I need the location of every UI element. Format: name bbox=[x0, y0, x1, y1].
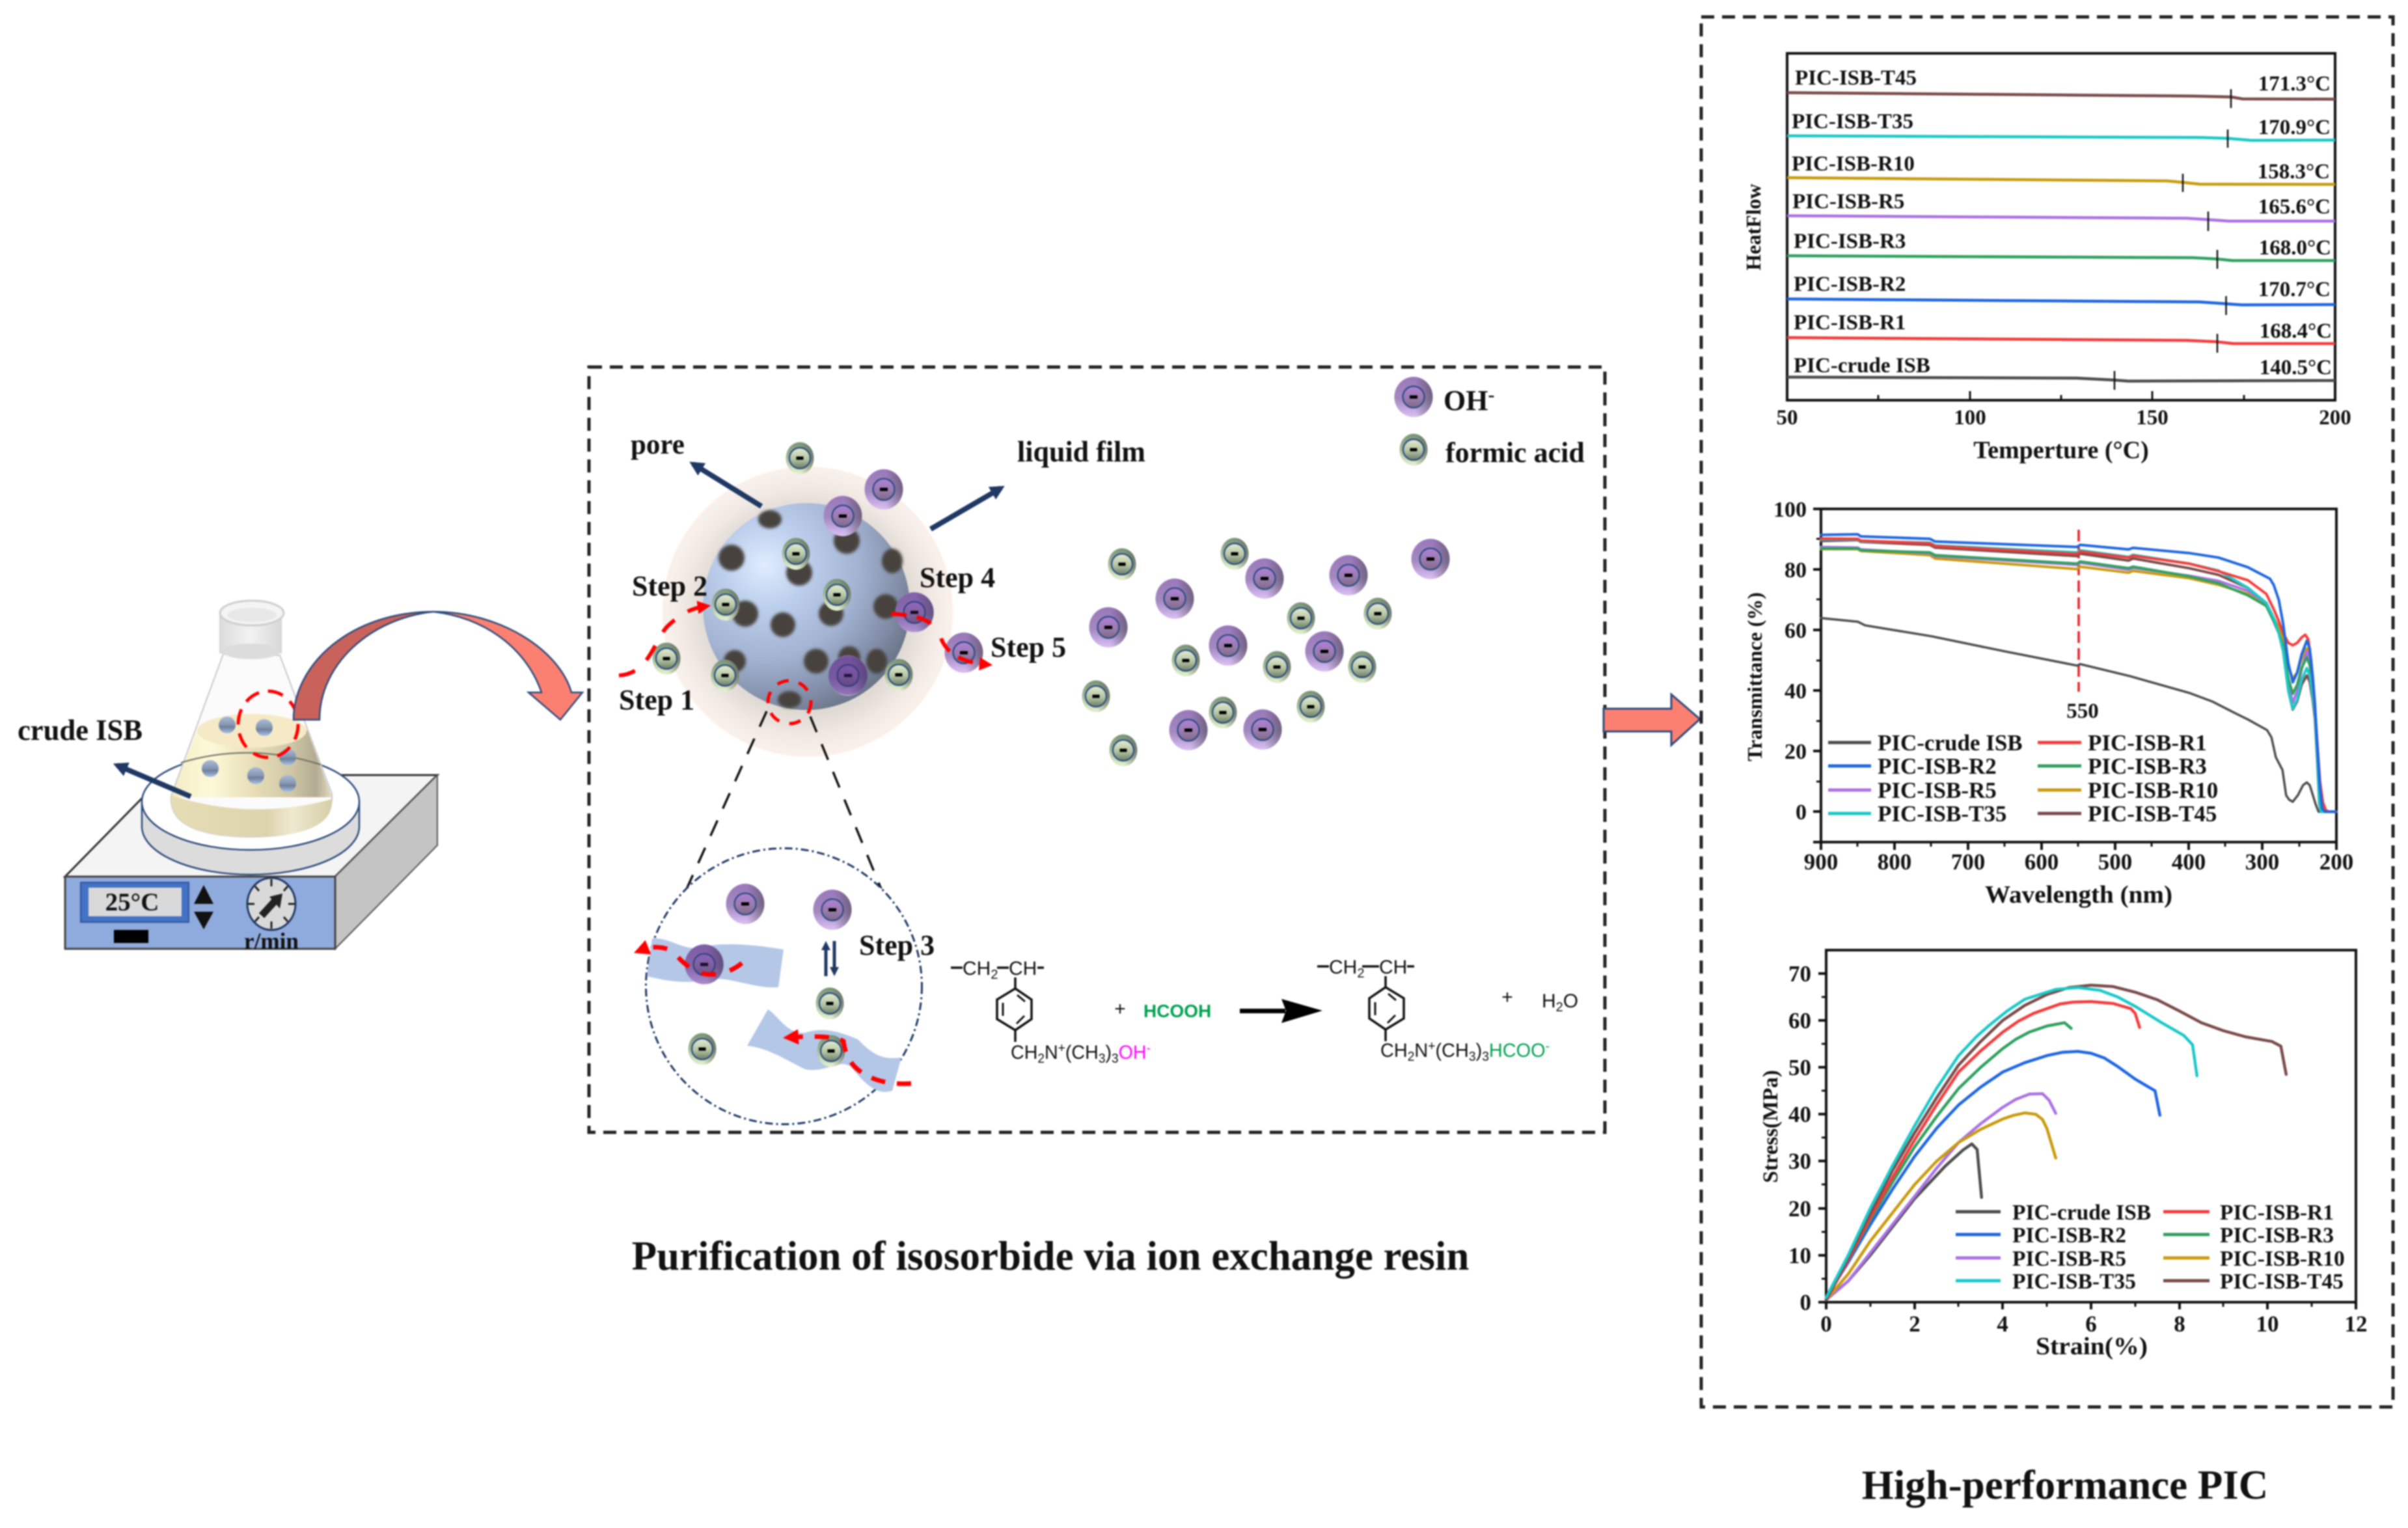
reactant resin structure: 3 bbox=[1099, 1052, 1105, 1066]
product resin structure: CH bbox=[1329, 957, 1357, 978]
stress x axis labels: 2 bbox=[1909, 1311, 1921, 1337]
dsc x axis title: Temperture (°C) bbox=[1973, 437, 2149, 464]
up and down buttons bbox=[194, 885, 213, 929]
panel: performance results bbox=[1701, 17, 2393, 1407]
stress y axis labels: 60 bbox=[1788, 1008, 1811, 1033]
label: crude ISB: crude ISB bbox=[18, 713, 143, 746]
flask with crude ISB bbox=[117, 601, 332, 837]
ribbon upper bbox=[647, 938, 784, 987]
dsc Tg values: 168.0°C bbox=[2259, 236, 2331, 260]
speed label: r/min bbox=[244, 928, 299, 954]
reactant resin structure: (CH bbox=[1065, 1042, 1099, 1063]
dsc Tg values: 170.7°C bbox=[2258, 278, 2331, 301]
panel: purification process bbox=[589, 367, 1605, 1132]
label: liquid film: liquid film bbox=[1017, 435, 1145, 468]
step labels: Step 1 bbox=[619, 684, 694, 716]
dsc Tg values: 170.9°C bbox=[2258, 116, 2331, 139]
spectrum legend: PIC-ISB-R5 bbox=[1878, 778, 1997, 803]
chart: UV-vis transmittance bbox=[1743, 498, 2353, 908]
dsc x axis labels: 100 bbox=[1954, 406, 1986, 430]
step labels: Step 3 bbox=[859, 929, 935, 961]
dsc series labels: PIC-crude ISB bbox=[1794, 354, 1930, 377]
dsc Tg values: 165.6°C bbox=[2258, 195, 2331, 219]
dsc series labels: PIC-ISB-T45 bbox=[1795, 66, 1917, 90]
plate rim seen through flask bbox=[181, 753, 321, 765]
spectrum y axis title: Transmittance (%) bbox=[1743, 592, 1766, 761]
hotplate front panel bbox=[65, 877, 335, 949]
stress y axis title: Stress(MPa) bbox=[1759, 1070, 1783, 1183]
spectrum y axis labels: 100 bbox=[1773, 498, 1807, 522]
pore pointer arrow bbox=[693, 464, 761, 506]
reaction arrow bbox=[1240, 999, 1322, 1023]
dsc x axis labels: 200 bbox=[2319, 406, 2351, 430]
spectrum x axis labels: 500 bbox=[2098, 849, 2132, 875]
legend: OH bbox=[1443, 385, 1488, 416]
stress y axis labels: 70 bbox=[1788, 961, 1811, 987]
liquid body bbox=[171, 730, 332, 797]
stress x axis title: Strain(%) bbox=[2036, 1333, 2148, 1360]
spectrum x axis labels: 700 bbox=[1951, 849, 1985, 875]
product resin structure: - bbox=[1546, 1039, 1550, 1054]
spectrum x axis title: Wavelength (nm) bbox=[1985, 881, 2172, 908]
red path upper bbox=[641, 947, 742, 974]
spectrum y axis labels: 0 bbox=[1796, 800, 1807, 825]
product resin structure: (CH bbox=[1436, 1040, 1469, 1061]
spectrum legend: PIC-ISB-R3 bbox=[2088, 754, 2207, 779]
reactant resin structure: 2 bbox=[991, 968, 998, 982]
stress x axis labels: 4 bbox=[1997, 1311, 2008, 1337]
reactant resin structure: - bbox=[1147, 1041, 1151, 1056]
stress x axis labels bbox=[1820, 1311, 2368, 1337]
reactant resin structure: ) bbox=[1105, 1042, 1112, 1063]
magnified pore view bbox=[641, 849, 922, 1125]
product resin structure: CH bbox=[1380, 1040, 1408, 1061]
liquid bowl bbox=[171, 795, 332, 837]
stress legend: PIC-ISB-T45 bbox=[2220, 1270, 2344, 1294]
dsc x axis labels bbox=[1777, 406, 2351, 430]
spectrum 550 label: 550 bbox=[2066, 700, 2099, 723]
stress frame and ticks bbox=[1818, 950, 2356, 1309]
reactant resin structure: 2 bbox=[1037, 1052, 1045, 1066]
zoom projection lines bbox=[687, 711, 881, 889]
spectrum x axis labels: 800 bbox=[1878, 849, 1911, 875]
spectrum legend: PIC-ISB-R10 bbox=[2088, 778, 2218, 803]
chart: stress strain bbox=[1759, 950, 2368, 1360]
free ions in solution bbox=[1082, 538, 1450, 767]
red dashed highlight circle bbox=[238, 691, 298, 757]
heating plate disk bbox=[142, 754, 359, 875]
pointer arrow bbox=[117, 765, 191, 797]
liquid film pointer arrow bbox=[931, 488, 1001, 529]
spectrum y axis labels bbox=[1773, 498, 1807, 825]
red path steps 4 to 5 bbox=[891, 614, 986, 664]
stress legend: PIC-ISB-R1 bbox=[2220, 1201, 2334, 1225]
stress y axis labels: 30 bbox=[1788, 1149, 1811, 1174]
resin bead bbox=[663, 467, 953, 757]
dsc frame bbox=[1787, 53, 2335, 400]
spectrum legend: PIC-ISB-T35 bbox=[1878, 801, 2006, 826]
dsc Tg values bbox=[2258, 72, 2332, 379]
stress x axis labels: 8 bbox=[2174, 1311, 2185, 1337]
product resin structure bbox=[1317, 957, 1550, 1064]
product resin structure: 3 bbox=[1469, 1050, 1476, 1064]
temperature display bbox=[81, 882, 189, 922]
stress y axis labels: 20 bbox=[1788, 1196, 1811, 1221]
isb beads bbox=[202, 716, 296, 792]
spectrum curves bbox=[1821, 534, 2336, 812]
hotplate side face bbox=[335, 775, 437, 949]
spectrum y axis labels: 80 bbox=[1785, 558, 1807, 582]
dsc glass transition ticks bbox=[2114, 89, 2231, 390]
red path lower bbox=[791, 1037, 911, 1084]
dsc series labels bbox=[1792, 66, 1930, 377]
dsc curves bbox=[1787, 92, 2335, 381]
dsc series labels: PIC-ISB-R5 bbox=[1792, 190, 1904, 213]
panel dashed border bbox=[589, 367, 1605, 1132]
reactant resin structure: CH bbox=[1011, 1042, 1039, 1063]
liquid surface bbox=[197, 714, 307, 748]
water formula: O bbox=[1563, 990, 1578, 1012]
stress y axis labels: 10 bbox=[1788, 1243, 1811, 1268]
spectrum legend: PIC-ISB-T45 bbox=[2088, 801, 2217, 826]
dsc y axis title: HeatFlow bbox=[1742, 184, 1765, 271]
spectrum x axis labels bbox=[1804, 849, 2353, 875]
stress legend: PIC-ISB-R5 bbox=[2012, 1247, 2126, 1271]
chart: DSC heat flow bbox=[1742, 53, 2351, 464]
curved arrow into process panel bbox=[294, 612, 582, 720]
spectrum y axis labels: 40 bbox=[1785, 679, 1807, 703]
product resin structure: + bbox=[1428, 1039, 1436, 1054]
stress legend bbox=[1956, 1201, 2345, 1294]
plus sign product: + bbox=[1501, 987, 1513, 1008]
stress x axis labels: 6 bbox=[2085, 1311, 2097, 1337]
arrow to results panel bbox=[1604, 694, 1700, 745]
stress y axis labels: 0 bbox=[1800, 1290, 1811, 1315]
reaction scheme bbox=[951, 957, 1578, 1066]
spectrum x axis labels: 400 bbox=[2172, 849, 2206, 875]
stress curves bbox=[1826, 985, 2286, 1300]
legend: - bbox=[1488, 384, 1494, 405]
reactant resin structure bbox=[951, 958, 1151, 1066]
product resin structure: HCOO bbox=[1489, 1040, 1546, 1061]
step labels: Step 4 bbox=[920, 562, 995, 593]
exchange arrows bbox=[821, 941, 839, 976]
dsc x axis labels: 50 bbox=[1777, 406, 1798, 430]
spectrum x axis labels: 900 bbox=[1804, 849, 1838, 875]
dsc series labels: PIC-ISB-T35 bbox=[1792, 110, 1913, 133]
spectrum frame and ticks bbox=[1813, 509, 2336, 850]
flask glass bbox=[171, 654, 332, 837]
dsc series labels: PIC-ISB-R3 bbox=[1794, 230, 1906, 253]
stress x axis labels: 10 bbox=[2256, 1311, 2279, 1337]
water formula: 2 bbox=[1556, 1000, 1563, 1015]
stress legend: PIC-ISB-T35 bbox=[2012, 1270, 2136, 1294]
dsc series labels: PIC-ISB-R1 bbox=[1794, 311, 1906, 334]
spectrum x axis labels: 200 bbox=[2319, 849, 2353, 875]
spectrum y axis labels: 20 bbox=[1785, 740, 1807, 764]
speed dial bbox=[247, 878, 295, 930]
step labels: Step 2 bbox=[632, 570, 707, 602]
plus sign: + bbox=[1114, 998, 1126, 1020]
label: pore: pore bbox=[631, 430, 685, 460]
spectrum legend: PIC-crude ISB bbox=[1878, 730, 2023, 756]
reactant resin structure: N bbox=[1045, 1042, 1058, 1063]
reactant resin structure: 3 bbox=[1112, 1052, 1119, 1066]
step labels bbox=[619, 562, 1066, 961]
stress legend: PIC-crude ISB bbox=[2012, 1201, 2151, 1225]
stress x axis labels: 12 bbox=[2344, 1311, 2368, 1337]
temperature display: 25°C bbox=[105, 888, 159, 916]
stress y axis labels: 50 bbox=[1788, 1055, 1811, 1080]
spectrum legend: PIC-ISB-R2 bbox=[1878, 754, 1997, 779]
stress y axis labels: 40 bbox=[1788, 1102, 1811, 1127]
product resin structure: CH bbox=[1379, 957, 1407, 978]
spectrum y axis labels: 60 bbox=[1785, 619, 1807, 643]
formic acid formula: HCOOH bbox=[1143, 1001, 1211, 1021]
spectrum 550 nm marker bbox=[2077, 530, 2080, 692]
reactant resin structure: + bbox=[1058, 1041, 1065, 1056]
magnified ions bbox=[685, 884, 851, 1067]
hotplate stirrer bbox=[65, 754, 437, 954]
product resin structure: ) bbox=[1476, 1040, 1482, 1061]
reactant resin structure: OH bbox=[1119, 1042, 1147, 1063]
liquid film bbox=[663, 467, 953, 757]
pores bbox=[718, 510, 903, 708]
stress x axis labels: 0 bbox=[1820, 1311, 1832, 1337]
spectrum x axis labels: 600 bbox=[2025, 849, 2059, 875]
black switch bbox=[114, 930, 148, 943]
dsc Tg values: 171.3°C bbox=[2258, 72, 2331, 96]
dsc Tg values: 158.3°C bbox=[2258, 160, 2330, 184]
ribbon lower bbox=[747, 1009, 901, 1092]
magnified circle bbox=[646, 849, 922, 1125]
results dashed border bbox=[1701, 17, 2393, 1407]
red path steps 1 to 2 bbox=[619, 607, 704, 675]
stress legend: PIC-ISB-R2 bbox=[2012, 1223, 2126, 1248]
step labels: Step 5 bbox=[991, 631, 1066, 663]
dsc x axis labels: 150 bbox=[2136, 406, 2169, 430]
spectrum legend: PIC-ISB-R1 bbox=[2088, 730, 2207, 756]
product resin structure: 2 bbox=[1357, 966, 1364, 981]
flask neck bbox=[220, 601, 284, 659]
dsc series labels: PIC-ISB-R10 bbox=[1792, 152, 1915, 176]
water formula: H bbox=[1542, 990, 1556, 1012]
spectrum legend bbox=[1828, 730, 2218, 826]
title: purification: Purification of isosorbide via ion exchange resin bbox=[632, 1233, 1469, 1279]
reactant resin structure: CH bbox=[963, 958, 991, 979]
spectrum x axis labels: 300 bbox=[2245, 849, 2279, 875]
ions on the bead bbox=[652, 443, 983, 696]
stress legend: PIC-ISB-R10 bbox=[2220, 1247, 2345, 1271]
dsc Tg values: 140.5°C bbox=[2260, 356, 2332, 379]
dsc series labels: PIC-ISB-R2 bbox=[1794, 273, 1906, 296]
reactant resin structure: CH bbox=[1009, 958, 1037, 979]
resin core bbox=[703, 503, 910, 710]
product resin structure: 3 bbox=[1482, 1050, 1489, 1064]
hotplate top face bbox=[65, 775, 437, 877]
product resin structure: 2 bbox=[1408, 1050, 1414, 1064]
legend bbox=[1394, 377, 1585, 469]
stress y axis labels bbox=[1788, 961, 1811, 1315]
title: high-performance PIC: High-performance PIC bbox=[1862, 1462, 2268, 1508]
stress legend: PIC-ISB-R3 bbox=[2220, 1223, 2334, 1248]
product resin structure: N bbox=[1414, 1040, 1428, 1061]
dsc Tg values: 168.4°C bbox=[2260, 320, 2332, 343]
red dashed pore highlight bbox=[768, 681, 811, 724]
legend: formic acid bbox=[1445, 437, 1585, 469]
